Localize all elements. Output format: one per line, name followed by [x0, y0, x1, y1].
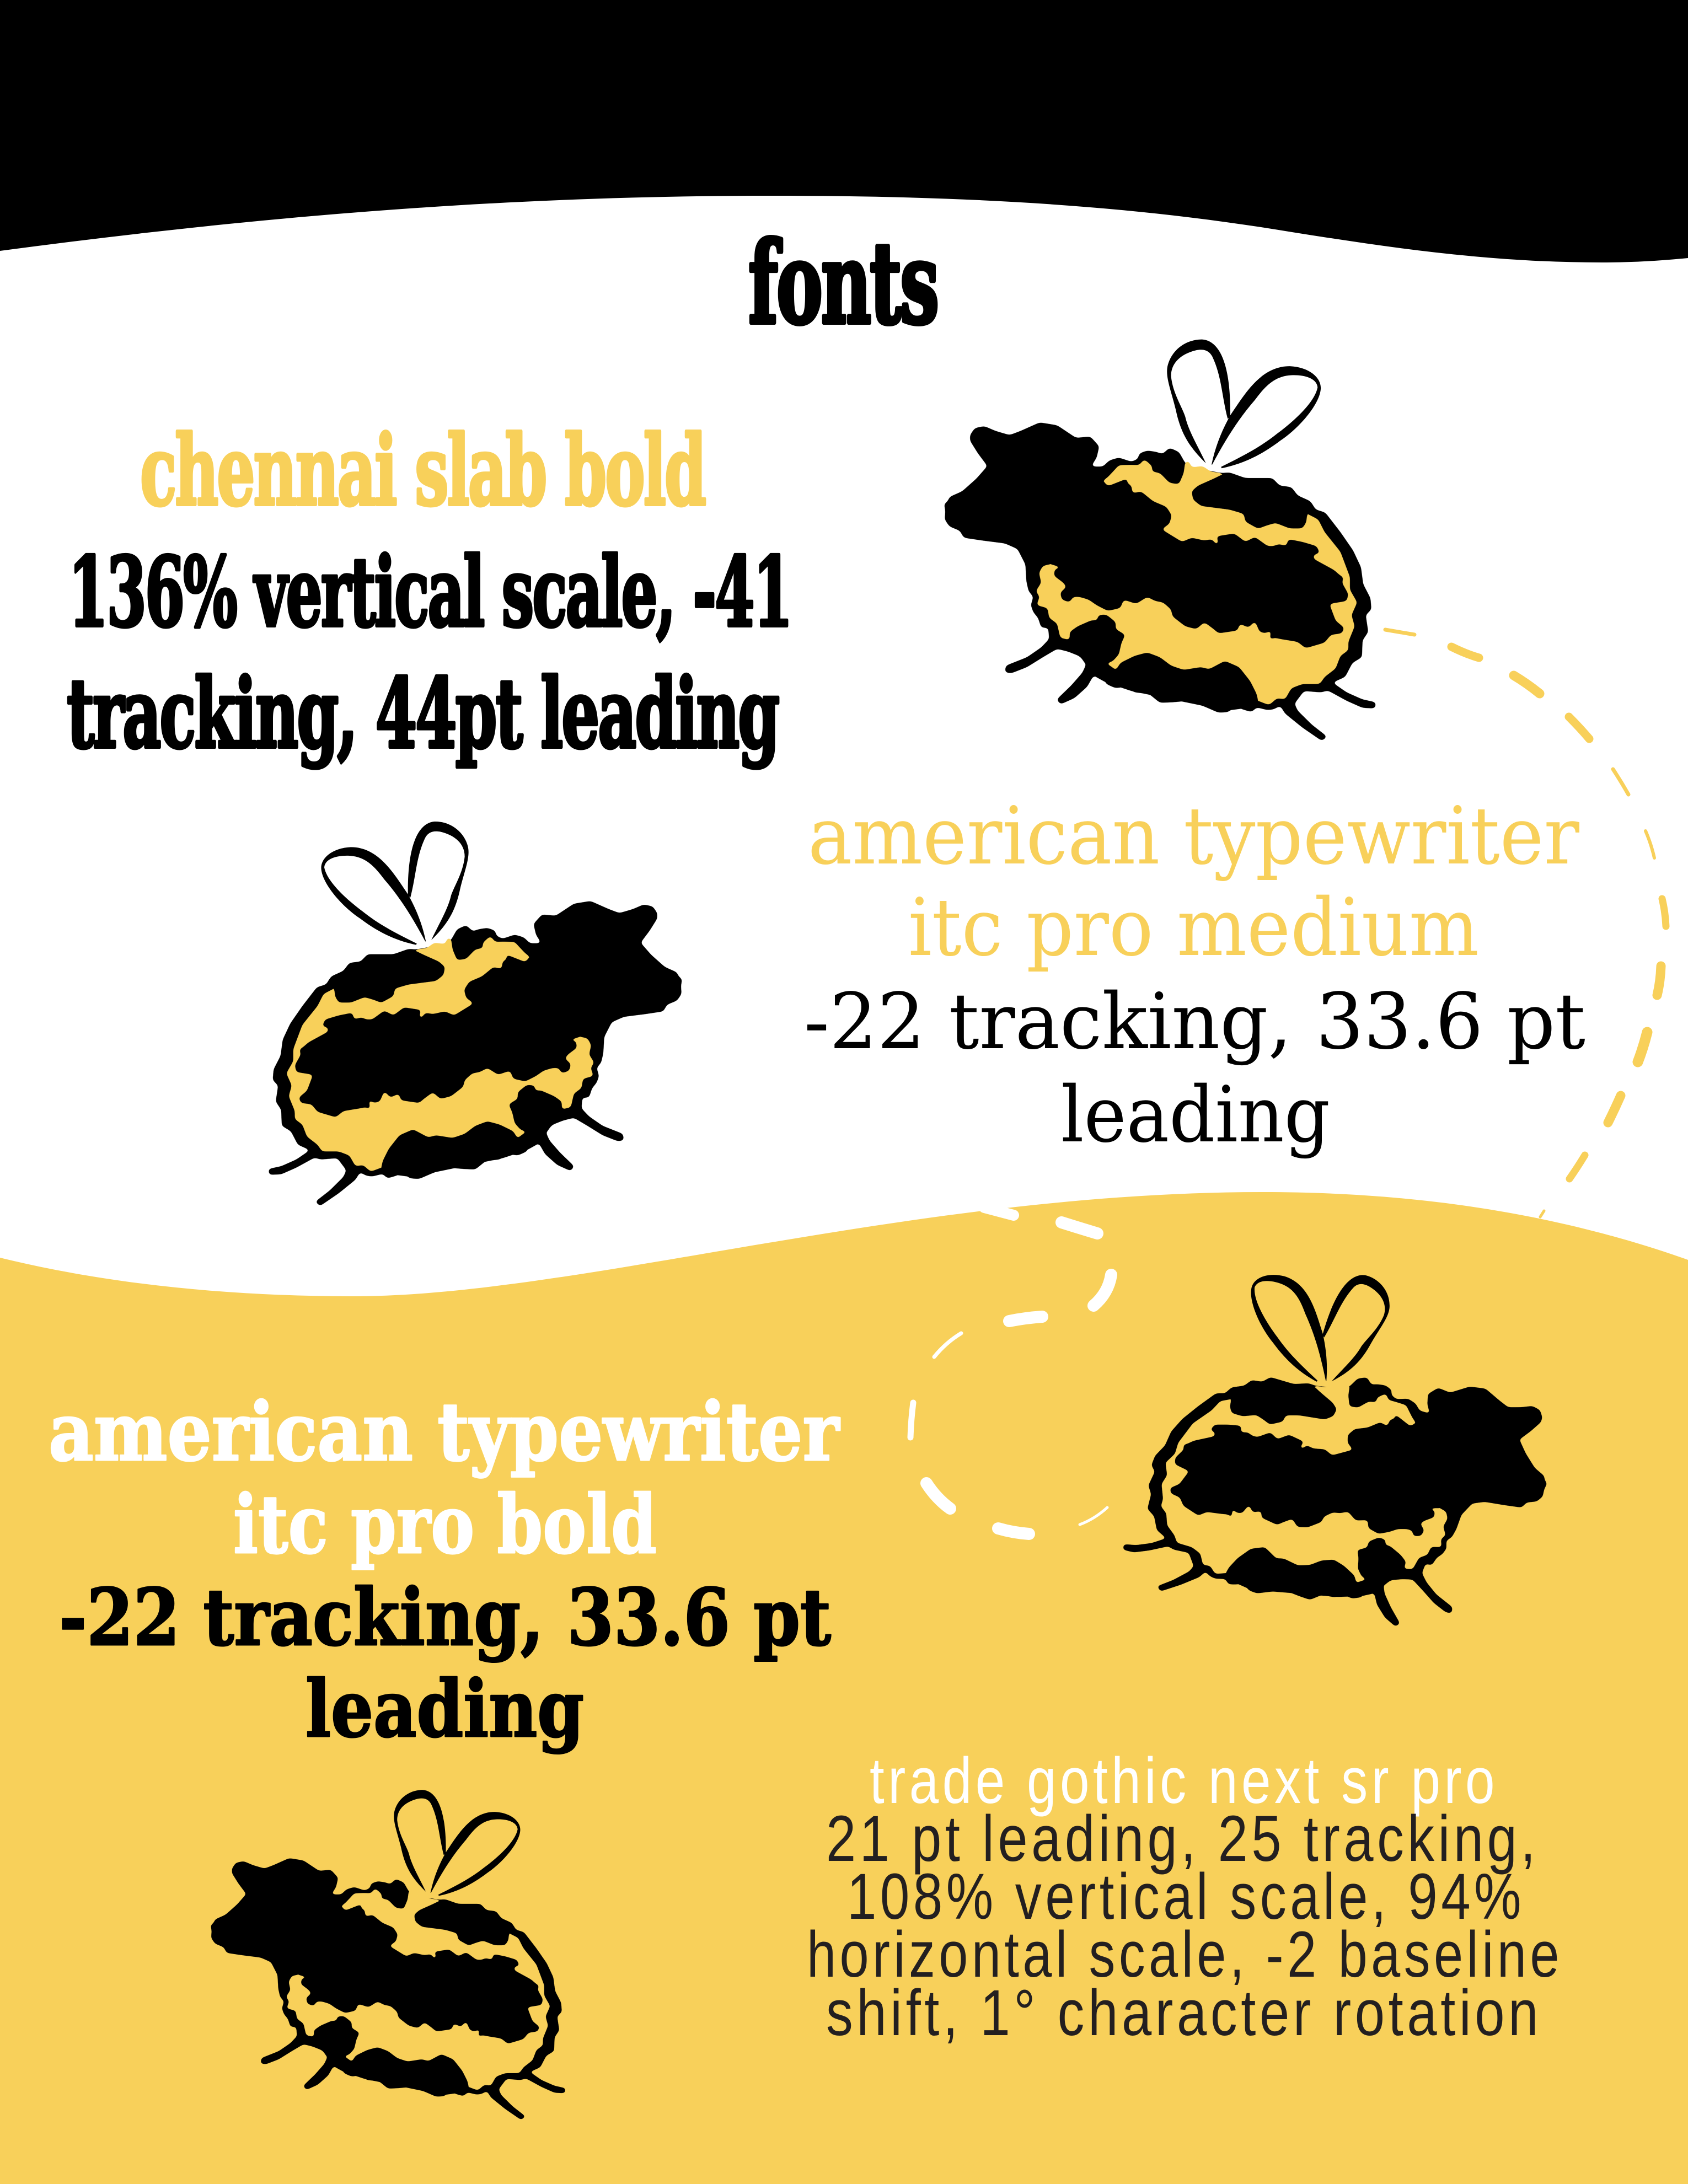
spec line 2: tracking, 44pt leading	[67, 658, 779, 770]
spec line 1: 21 pt leading, 25 tracking,	[826, 1802, 1539, 1875]
spec line 1: -22 tracking, 33.6 pt	[59, 1572, 831, 1664]
text block: trade gothic	[807, 1745, 1563, 2049]
heading line 1: american typewriter	[808, 790, 1579, 882]
spec line 2: leading	[1061, 1070, 1330, 1160]
icon: bee lower right	[1114, 1231, 1589, 1688]
spec line 1: -22 tracking, 33.6 pt	[804, 977, 1585, 1067]
yellow wave panel at bottom	[0, 1192, 1688, 2184]
text block: american typewriter bold	[49, 1385, 840, 1755]
spec line 2: 108% vertical scale, 94%	[847, 1860, 1525, 1933]
spec line 2: leading	[306, 1664, 584, 1755]
black wave band at top	[0, 0, 1688, 262]
icon: bee bottom left	[211, 1790, 565, 2120]
text block: american typewriter medium	[804, 790, 1585, 1160]
icon: bee top right	[944, 340, 1376, 741]
heading line 2: itc pro medium	[908, 881, 1479, 974]
heading line 2: itc pro bold	[233, 1478, 657, 1572]
icon: bee middle left	[269, 822, 682, 1206]
spec line 1: 136% vertical scale, -41	[68, 536, 791, 649]
arrow: yellow dashed flight path	[1385, 630, 1666, 1217]
arrow: white dashed loop	[910, 1208, 1111, 1534]
text block: chennai slab	[67, 415, 791, 770]
heading: trade gothic next sr pro	[870, 1745, 1498, 1817]
heading: chennai slab bold: chennai slab bold	[140, 415, 705, 528]
spec line 4: shift, 1° character rotation	[826, 1977, 1542, 2049]
title: fonts	[748, 217, 937, 350]
heading line 1: american typewriter	[49, 1385, 840, 1479]
